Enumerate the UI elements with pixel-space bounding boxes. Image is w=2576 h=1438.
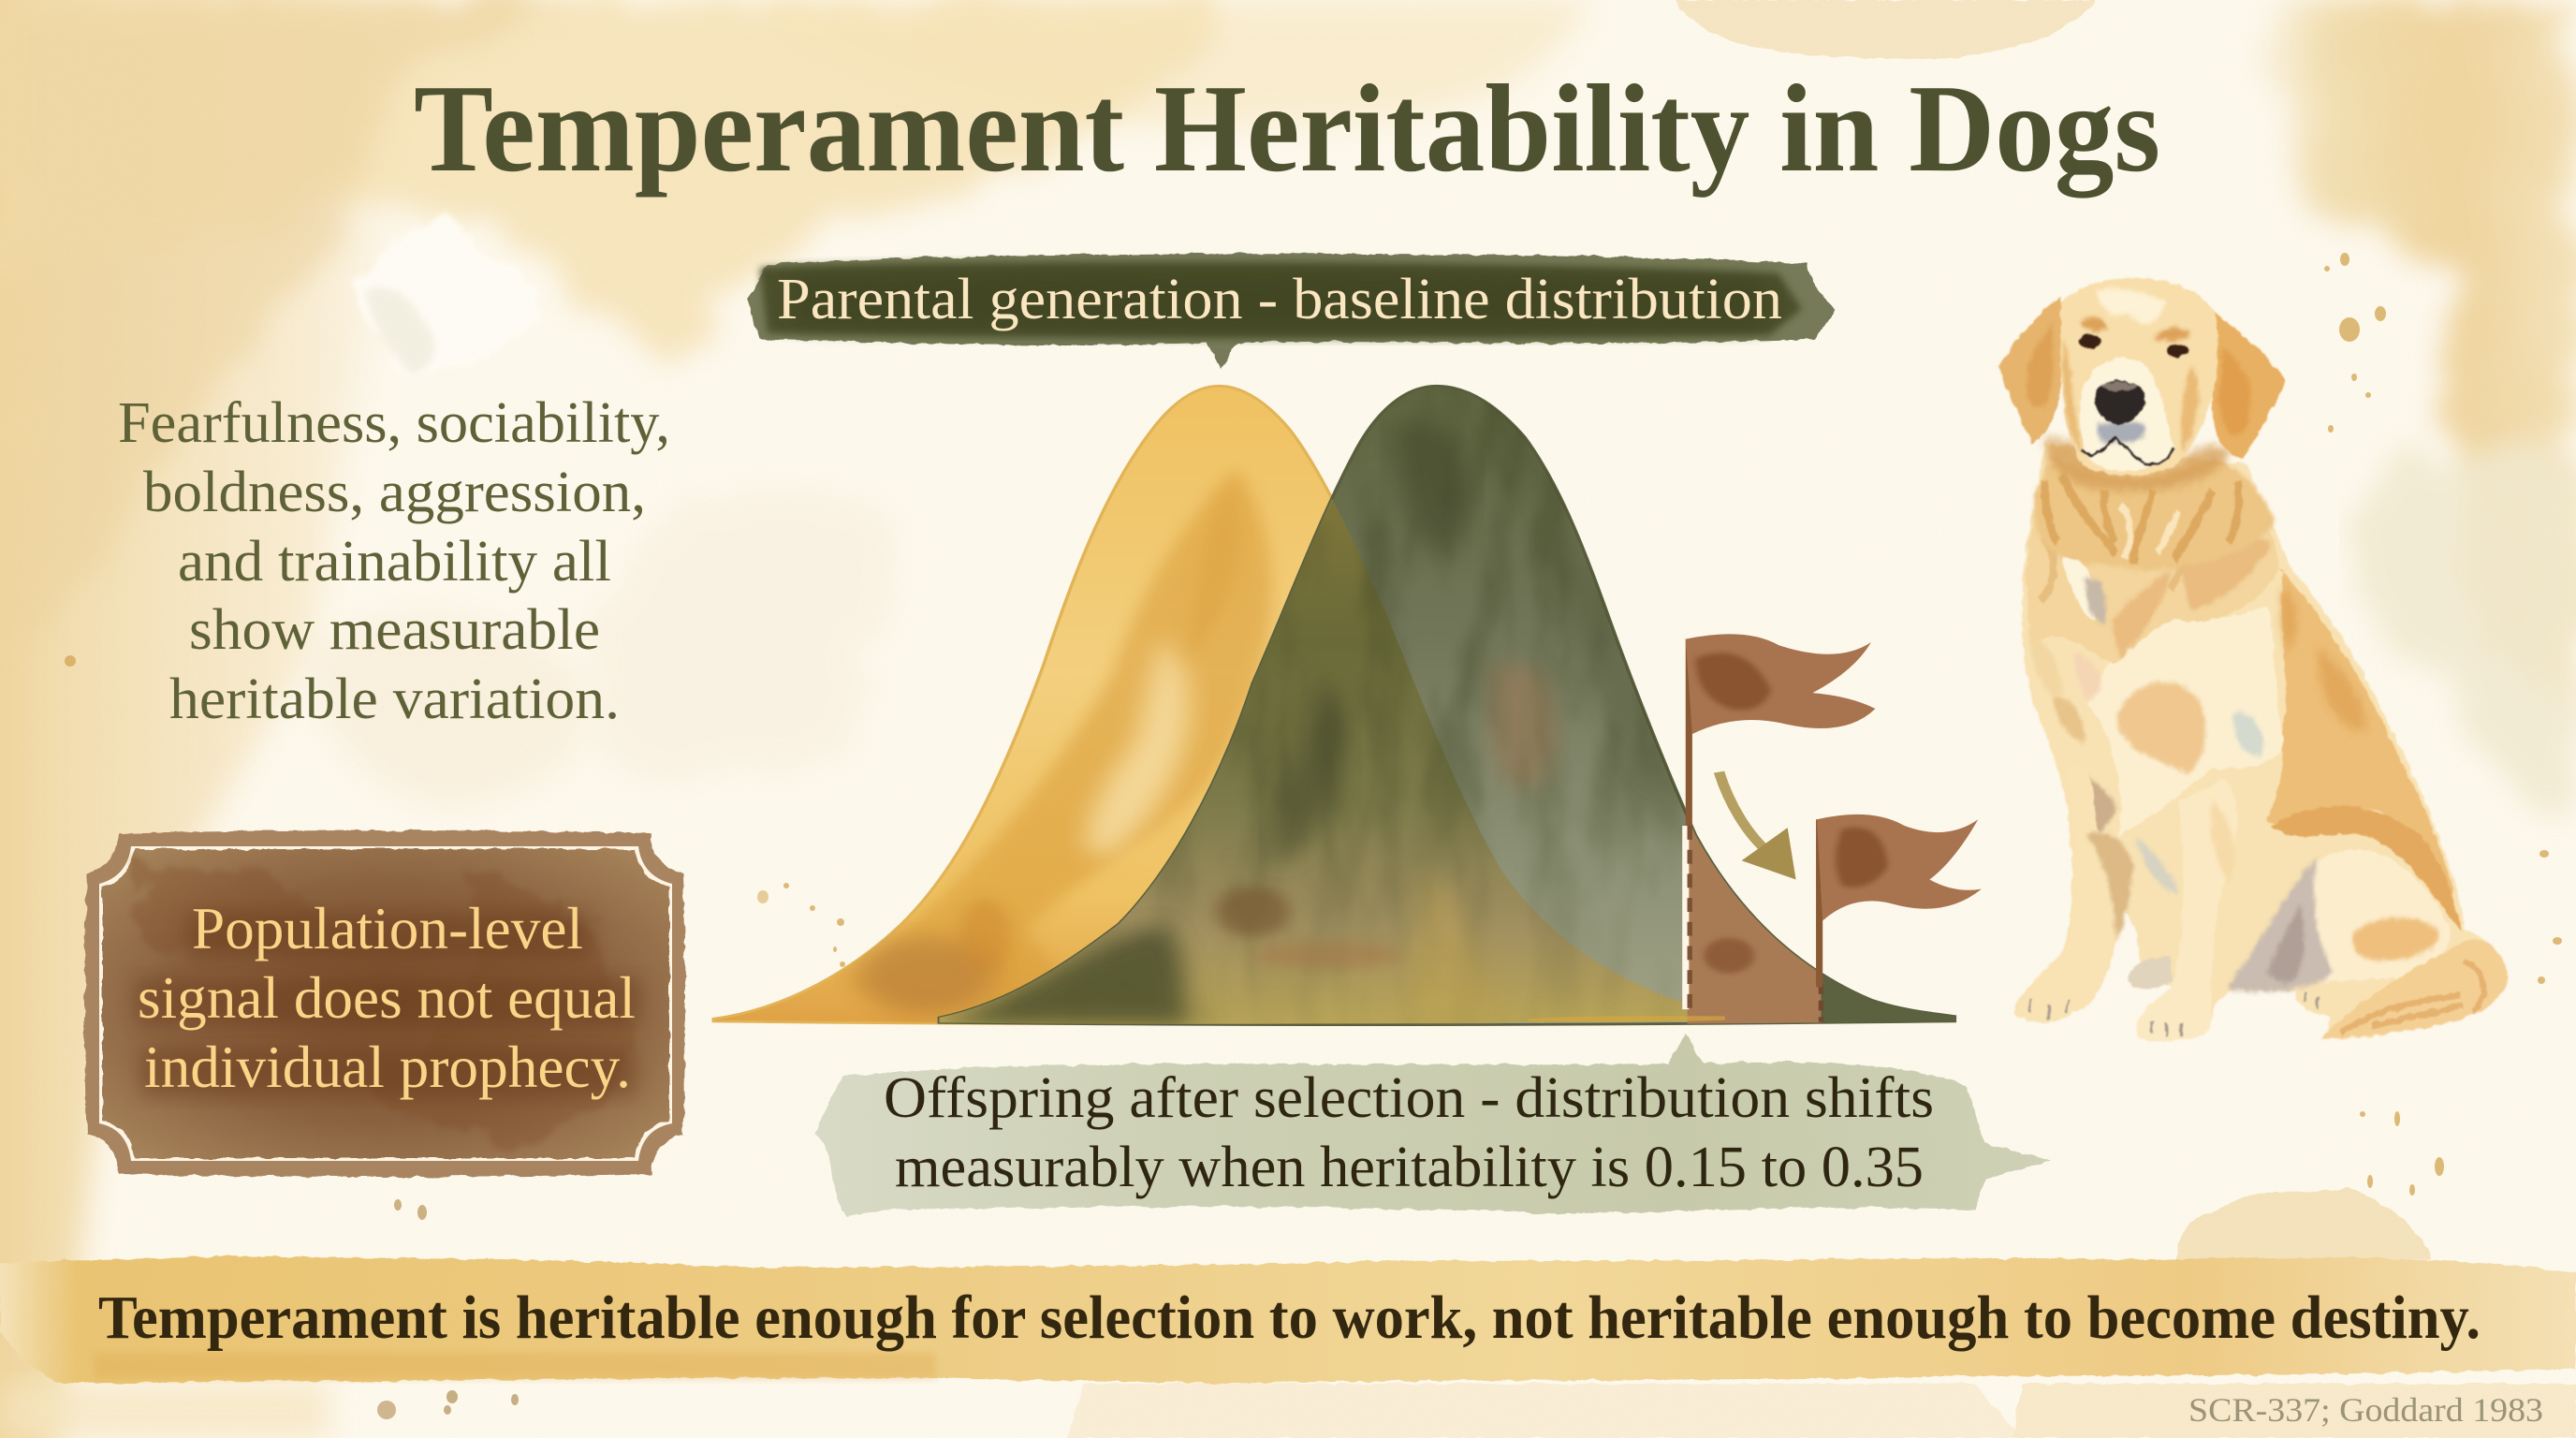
nose (2095, 381, 2145, 426)
ruff (2034, 453, 2276, 570)
label: parental generation (747, 254, 1835, 369)
label: offspring after selection (814, 1034, 2050, 1217)
under-nose shadow (2097, 423, 2145, 444)
haunch (2271, 806, 2462, 932)
shoulder strokes (2112, 538, 2271, 658)
head (2060, 278, 2217, 476)
text block: traits (118, 391, 670, 731)
neck shadow (2044, 438, 2232, 492)
callout: population-level signal: individual prophecy. (144, 1034, 631, 1100)
dog body silhouette (2014, 443, 2508, 1042)
front right leg (2137, 779, 2237, 1041)
underbelly shadow (2229, 858, 2334, 991)
mouth (2083, 437, 2174, 464)
left ear (1998, 296, 2063, 444)
offspring distribution curve (olive) (927, 386, 1963, 1025)
arrow: threshold shift (1719, 772, 1796, 880)
text block: traits: and trainability all (178, 530, 611, 594)
callout: population-level signal (84, 830, 685, 1177)
text block: traits: boldness, aggression, (143, 461, 646, 524)
forehead markings (2095, 288, 2166, 325)
paint splatter dots (65, 253, 2562, 1419)
label: offspring after selection: measurably when heritability is 0.15 to 0.35 (895, 1136, 1924, 1199)
label: parental generation: Parental generation - baseline distribution (777, 268, 1782, 331)
claws (2030, 992, 2317, 1036)
muzzle (2079, 359, 2174, 472)
thigh (2291, 849, 2451, 982)
illustration: golden retriever (1998, 278, 2508, 1042)
text block: traits: show measurable (189, 598, 600, 662)
chest (2086, 606, 2283, 837)
bottom conclusion banner (0, 1256, 2576, 1384)
selection threshold dashed lines (1686, 826, 1821, 1022)
bell curves chart (713, 386, 1982, 1025)
bottom conclusion banner: Temperament is heritable enough for selection to work, not heritable enough to become destiny. (98, 1284, 2481, 1352)
label: offspring after selection: Offspring after selection - distribution shifts (884, 1066, 1934, 1130)
flag: offspring threshold (1817, 814, 1982, 987)
right ear (2211, 312, 2286, 460)
source citation: SCR-337; Goddard 1983 (2188, 1391, 2543, 1429)
right eye (2167, 344, 2188, 357)
text block: traits: heritable variation. (169, 668, 620, 731)
callout: population-level signal: signal does not equal (138, 964, 636, 1031)
back paw (2129, 955, 2173, 989)
front left leg (2015, 764, 2114, 1022)
upper body gold (2027, 464, 2279, 664)
parental distribution curve (yellow) (711, 384, 1332, 1026)
left eye (2080, 335, 2101, 348)
text block: traits: Fearfulness, sociability, (118, 391, 670, 455)
back and flank (2267, 569, 2460, 927)
callout: population-level signal: Population-level (192, 895, 583, 961)
title: Temperament Heritability in Dogs (414, 59, 2160, 198)
flag: parental threshold (1686, 634, 1875, 826)
tail (2321, 939, 2508, 1039)
